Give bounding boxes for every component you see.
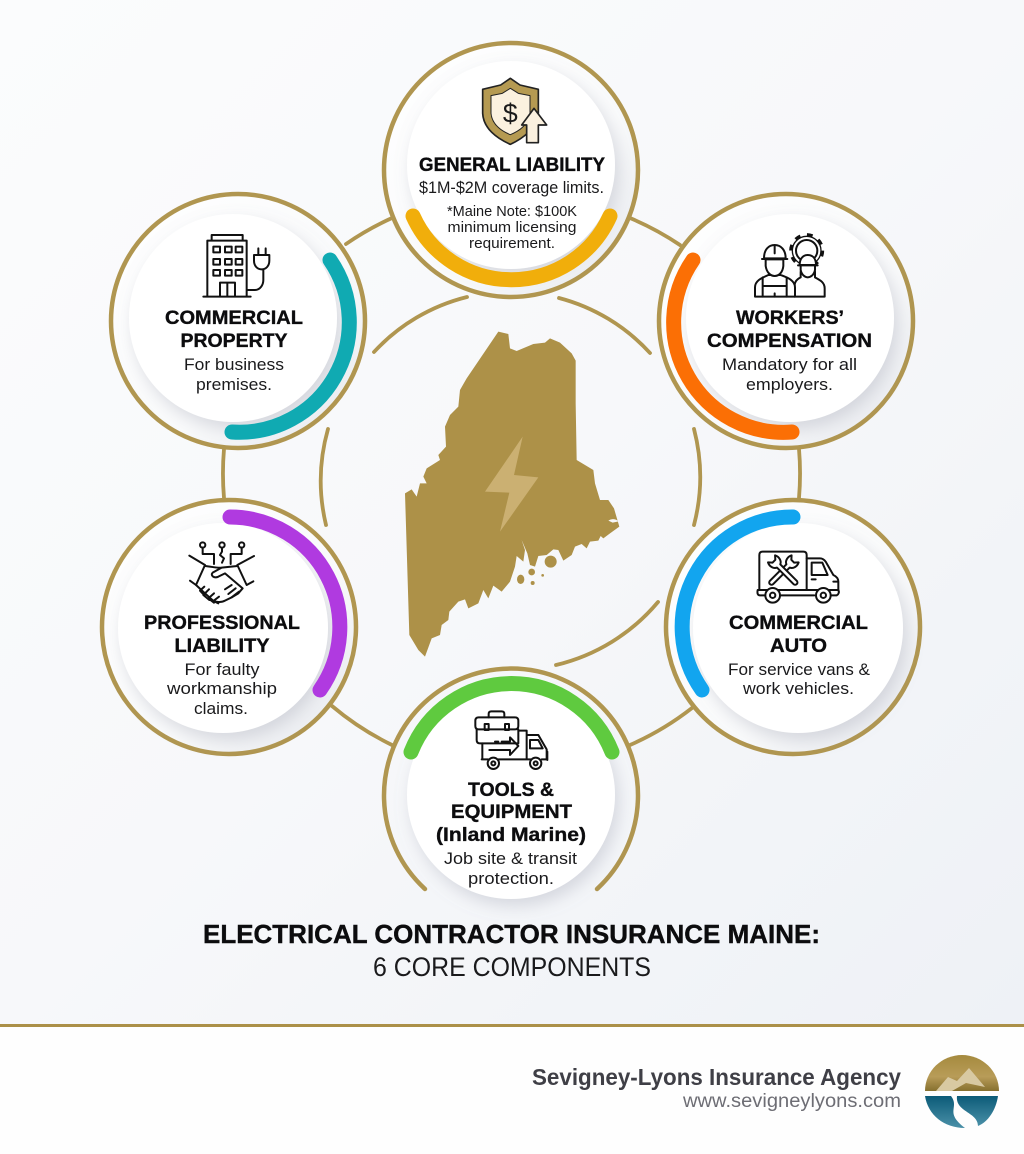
heading: PROFESSIONAL: [144, 613, 300, 634]
heading: AUTO: [770, 636, 827, 657]
icon: toolbox and truck: [475, 711, 547, 769]
heading: LIABILITY: [174, 636, 270, 657]
icon: shield with dollar and arrow: $: [503, 98, 518, 128]
description: For business: [184, 356, 284, 374]
footer: website: www.sevigneylyons.com: [682, 1091, 901, 1112]
Maine note: requirement.: [469, 236, 555, 252]
description: Mandatory for all: [722, 356, 857, 374]
heading: [144, 613, 300, 657]
icon: handshake with circuits: [189, 542, 254, 603]
description: protection.: [468, 870, 554, 888]
outer connecting ring: [223, 218, 800, 745]
panel: professional liability: [102, 500, 356, 754]
footer band: [0, 1024, 1024, 1154]
description: Job site & transit: [444, 850, 577, 868]
heading: GENERAL LIABILITY: [419, 155, 605, 176]
heading: EQUIPMENT: [451, 802, 572, 823]
description: [728, 661, 870, 698]
Maine note: [447, 204, 577, 252]
description: For faulty: [184, 661, 260, 679]
heading: WORKERS’: [736, 308, 844, 329]
Maine note: minimum licensing: [448, 220, 576, 236]
Maine map with lightning bolt: [405, 332, 619, 657]
title: ELECTRICAL CONTRACTOR INSURANCE MAINE:: [203, 919, 820, 949]
panel: general liability: [384, 43, 638, 297]
description: [166, 661, 277, 718]
heading: COMMERCIAL: [165, 308, 303, 329]
heading: COMPENSATION: [707, 331, 872, 352]
heading: TOOLS &: [468, 780, 554, 801]
heading: (Inland Marine): [436, 825, 586, 846]
description: workmanship: [166, 680, 277, 698]
heading: COMMERCIAL: [729, 613, 868, 634]
panel: commercial auto: [666, 500, 920, 754]
heading: [436, 780, 586, 846]
title: [203, 919, 820, 982]
description: [444, 850, 577, 888]
description: premises.: [196, 376, 272, 394]
description: [722, 356, 857, 394]
Maine note: *Maine Note: $100K: [447, 204, 577, 220]
heading: PROPERTY: [180, 331, 288, 352]
title: 6 CORE COMPONENTS: [373, 952, 651, 982]
icon: service truck with wrenches: [757, 552, 839, 603]
inner connecting ring: [321, 297, 700, 665]
description: employers.: [746, 376, 833, 394]
icon: building with plug: [203, 235, 269, 297]
description: For service vans &: [728, 661, 870, 679]
coverage text: $1M-$2M coverage limits.: [419, 179, 604, 197]
heading: [707, 308, 872, 352]
panel: commercial property: [111, 194, 365, 448]
description: work vehicles.: [742, 680, 854, 698]
description: [184, 356, 284, 394]
icon: shield with dollar and arrow: [483, 78, 547, 144]
panel: tools and equipment: [384, 669, 638, 899]
heading: [165, 308, 303, 352]
panel: workers' compensation: [659, 194, 913, 448]
logo: [925, 1055, 999, 1128]
footer: agency name: Sevigney-Lyons Insurance Agency: [532, 1064, 901, 1090]
heading: [729, 613, 868, 657]
description: claims.: [194, 700, 248, 718]
icon: workers and gear: [755, 235, 825, 297]
